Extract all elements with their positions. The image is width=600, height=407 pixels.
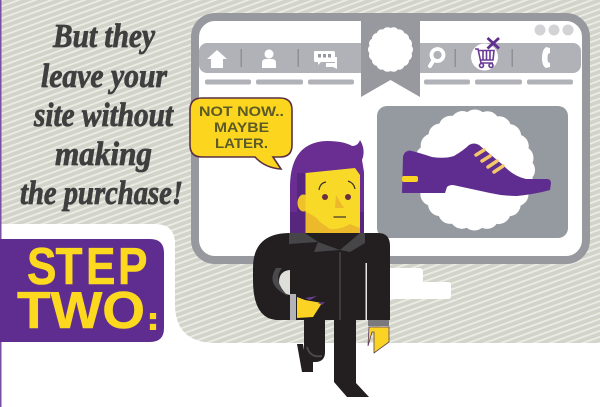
step two heading: TWO bbox=[17, 282, 145, 340]
left fingers bbox=[305, 296, 325, 305]
icon: user bbox=[262, 50, 276, 68]
icon: chat bbox=[314, 51, 337, 69]
heading: script text: site without bbox=[33, 97, 174, 134]
left purple edge bbox=[0, 0, 2, 407]
icon: home bbox=[207, 50, 227, 68]
back leg and foot bbox=[297, 318, 325, 372]
step two heading bbox=[17, 238, 158, 340]
left cuff bbox=[290, 294, 296, 320]
speech bubble bbox=[190, 98, 292, 169]
face bbox=[306, 168, 360, 233]
arm highlight bbox=[366, 263, 367, 320]
left hand bbox=[297, 297, 322, 318]
brows and mouth bbox=[319, 181, 355, 217]
character bbox=[253, 140, 390, 397]
hair bbox=[290, 140, 364, 234]
shoe heel tab bbox=[402, 176, 418, 182]
collar bbox=[289, 233, 365, 252]
shoe laces bbox=[476, 150, 503, 172]
window control dots bbox=[534, 24, 574, 36]
heading: script text: But they bbox=[52, 18, 156, 55]
icon: cancelled cart bbox=[471, 38, 499, 70]
arm gap bbox=[279, 270, 290, 295]
step two heading: STEP bbox=[27, 238, 147, 296]
icon: phone bbox=[542, 47, 550, 68]
right cuff bbox=[368, 320, 389, 326]
bubble text bbox=[199, 103, 284, 151]
zipper bbox=[340, 252, 341, 320]
panel: step two bbox=[0, 238, 164, 342]
menu placeholder lines bbox=[205, 80, 573, 84]
inner hair shade bbox=[297, 173, 306, 234]
nose shade bbox=[335, 195, 344, 208]
shoe knee crease bbox=[307, 347, 322, 356]
bubble text: LATER. bbox=[215, 135, 268, 151]
ribbon badge bbox=[361, 13, 420, 97]
heading: script text: the purchase! bbox=[20, 175, 183, 212]
jacket and arms bbox=[253, 233, 390, 320]
heading: script text: leave your bbox=[41, 58, 168, 95]
bubble text: NOT NOW.. bbox=[199, 103, 284, 119]
clouds behind character bbox=[390, 268, 451, 299]
white lower area with rounded cutout bbox=[2, 224, 600, 407]
bubble text: MAYBE bbox=[214, 119, 269, 135]
icon: magnifier bbox=[430, 49, 444, 66]
heading: script text bbox=[20, 18, 183, 212]
shoe bbox=[402, 144, 551, 196]
front leg and foot bbox=[334, 318, 369, 397]
nav separators bbox=[240, 49, 513, 67]
heading: script text: making bbox=[55, 136, 152, 173]
scalloped white badge bbox=[426, 122, 523, 218]
step two heading: : bbox=[148, 303, 158, 336]
ear bbox=[298, 194, 310, 212]
product panel: shoe bbox=[377, 106, 568, 238]
navigation bar bbox=[199, 43, 581, 73]
right hand bbox=[368, 327, 389, 353]
face shadow bbox=[306, 212, 360, 233]
arm crease bbox=[272, 268, 288, 296]
eyes bbox=[322, 194, 351, 200]
browser window bbox=[195, 13, 586, 260]
lower hair shade bbox=[290, 212, 364, 234]
